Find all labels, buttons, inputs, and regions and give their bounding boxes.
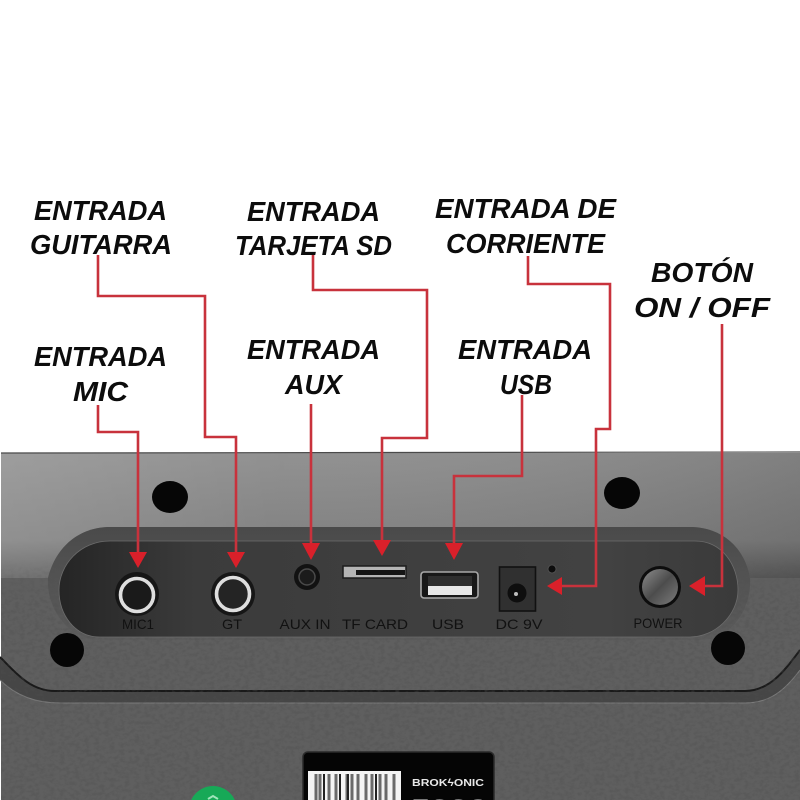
label: boton on off: BOTÓN xyxy=(651,257,754,288)
label: entrada de corriente: ENTRADA DE xyxy=(435,193,617,224)
port: DC 9V: DC 9V xyxy=(496,616,543,632)
arrow: power input xyxy=(528,256,610,595)
label: entrada usb: USB xyxy=(500,369,552,400)
port: USB: USB xyxy=(432,616,464,632)
label: entrada tarjeta sd: ENTRADA xyxy=(247,196,380,227)
product label xyxy=(303,752,494,800)
barcode xyxy=(308,771,401,800)
label: entrada guitarra: ENTRADA xyxy=(34,195,167,226)
port: DC 9V xyxy=(496,565,556,632)
label: entrada mic: MIC xyxy=(73,376,129,407)
port: USB xyxy=(421,572,478,632)
jack: AUX IN xyxy=(280,564,330,632)
jack: GT xyxy=(211,572,255,632)
brand name: BROKϟONIC xyxy=(412,778,484,789)
recessed port panel xyxy=(59,541,738,637)
label: entrada aux: ENTRADA xyxy=(247,334,380,365)
label: entrada de corriente: CORRIENTE xyxy=(446,228,606,259)
arrow: mic xyxy=(98,405,147,568)
label: entrada tarjeta sd: TARJETA SD xyxy=(235,230,392,261)
label: entrada aux xyxy=(247,334,380,400)
label: entrada guitarra xyxy=(30,195,172,260)
lower groove xyxy=(0,650,800,703)
label: entrada mic: ENTRADA xyxy=(34,341,167,372)
speaker body xyxy=(0,452,800,800)
slot: TF CARD: TF CARD xyxy=(342,616,408,632)
upper light panel xyxy=(1,453,800,578)
arrow: aux xyxy=(302,404,320,560)
arrow: usb xyxy=(445,395,522,560)
button: POWER: POWER xyxy=(634,615,682,631)
label: entrada usb xyxy=(458,334,592,400)
arrow: on off button xyxy=(689,324,722,596)
jack: MIC1 xyxy=(115,572,159,632)
jack: AUX IN: AUX IN xyxy=(280,616,330,632)
label: entrada aux: AUX xyxy=(284,369,344,400)
jack: GT: GT xyxy=(222,616,242,632)
label: boton on off: ON / OFF xyxy=(634,292,771,323)
label: entrada guitarra: GUITARRA xyxy=(30,229,172,260)
button: POWER xyxy=(634,566,682,631)
green sticker xyxy=(189,786,237,800)
label: entrada mic xyxy=(34,341,167,407)
jack: MIC1: MIC1 xyxy=(122,616,154,632)
label: entrada usb: ENTRADA xyxy=(458,334,592,365)
surface texture xyxy=(1,650,800,704)
recess bevel xyxy=(48,527,750,640)
mounting holes xyxy=(50,477,745,667)
label: boton on off xyxy=(634,257,771,323)
label: entrada tarjeta sd xyxy=(235,196,392,261)
label: entrada de corriente xyxy=(435,193,617,259)
arrow: guitar xyxy=(98,255,245,568)
arrow: sd card xyxy=(313,255,427,556)
slot: TF CARD xyxy=(342,566,408,632)
